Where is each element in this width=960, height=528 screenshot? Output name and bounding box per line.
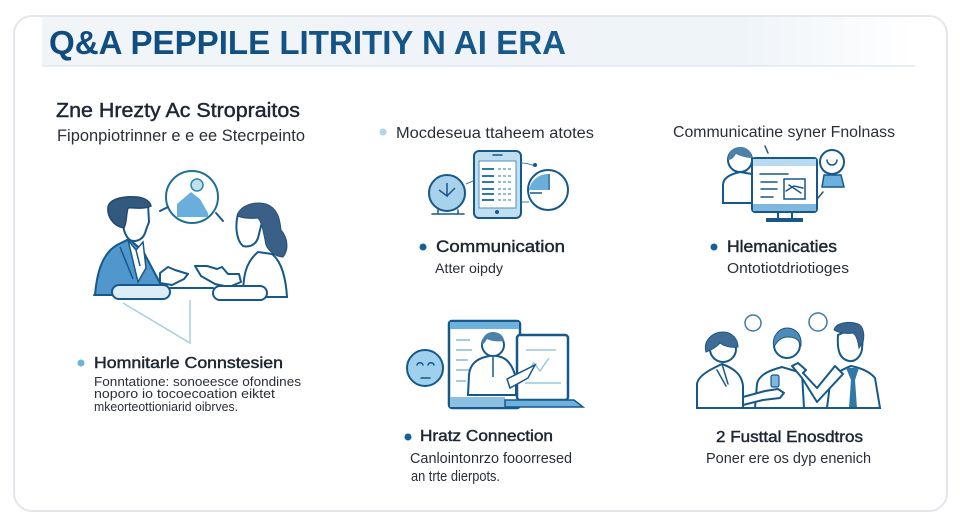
label: human connection: an trte dierpots. bbox=[411, 468, 500, 485]
panel: left intro and discussion bbox=[56, 100, 305, 414]
label: communication: Atter oipdy bbox=[435, 260, 503, 276]
heading: left panel: Zne Hrezty Ac Stropraitos bbox=[56, 100, 300, 122]
label: communication: Communication bbox=[436, 237, 565, 256]
pointer triangle bbox=[123, 300, 190, 343]
bullet text: left panel bbox=[78, 355, 302, 414]
bullet text: left panel: mkeorteottioniarid oibrves. bbox=[94, 399, 238, 414]
label: communication bbox=[420, 237, 565, 276]
caption: humanities: Communicatine syner Fnolnass bbox=[673, 124, 895, 141]
header band bbox=[42, 17, 915, 66]
label: humanities bbox=[710, 237, 849, 277]
panel: human connection bbox=[404, 321, 583, 485]
icon: three people talking bbox=[697, 313, 880, 408]
woman bbox=[195, 203, 287, 297]
icon: presenter with laptop bbox=[407, 321, 583, 408]
icon: speech bubble with profile bbox=[160, 171, 223, 223]
label: human connection: Canlointonrzo fooorresed bbox=[410, 450, 572, 467]
panel: social group bbox=[697, 313, 880, 467]
caption: communication: Mocdeseua ttaheem atotes bbox=[396, 125, 594, 142]
bullet text: left panel: noporo io tocoecoation eiktet bbox=[94, 386, 275, 401]
illustration: two people in conversation bbox=[94, 171, 287, 343]
label: human connection: Hratz Connection bbox=[420, 428, 553, 445]
icon: tablet with clocks bbox=[429, 151, 568, 218]
label: humanities: Hlemanicaties bbox=[727, 237, 837, 256]
label: social group: 2 Fusttal Enosdtros bbox=[716, 429, 863, 446]
icon: person with monitor bbox=[723, 146, 844, 222]
label: social group: Poner ere os dyp enenich bbox=[706, 451, 871, 467]
man in suit bbox=[95, 197, 188, 295]
label: humanities: Ontotiotdriotioges bbox=[727, 261, 849, 277]
title: Q&A PEPPILE LITRITIY N AI ERA bbox=[49, 24, 566, 61]
panel: communication bbox=[380, 125, 594, 276]
label: human connection bbox=[404, 428, 572, 485]
bullet text: left panel: Fonntatione: sonoeesce ofondines bbox=[94, 374, 302, 389]
subheading: left panel: Fiponpiotrinner e e ee Stecrpeinto bbox=[57, 126, 305, 145]
table bbox=[94, 285, 287, 300]
label: social group bbox=[706, 429, 871, 467]
panel: humanities bbox=[673, 124, 895, 277]
bullet text: left panel: Homnitarle Connstesien bbox=[94, 355, 283, 372]
